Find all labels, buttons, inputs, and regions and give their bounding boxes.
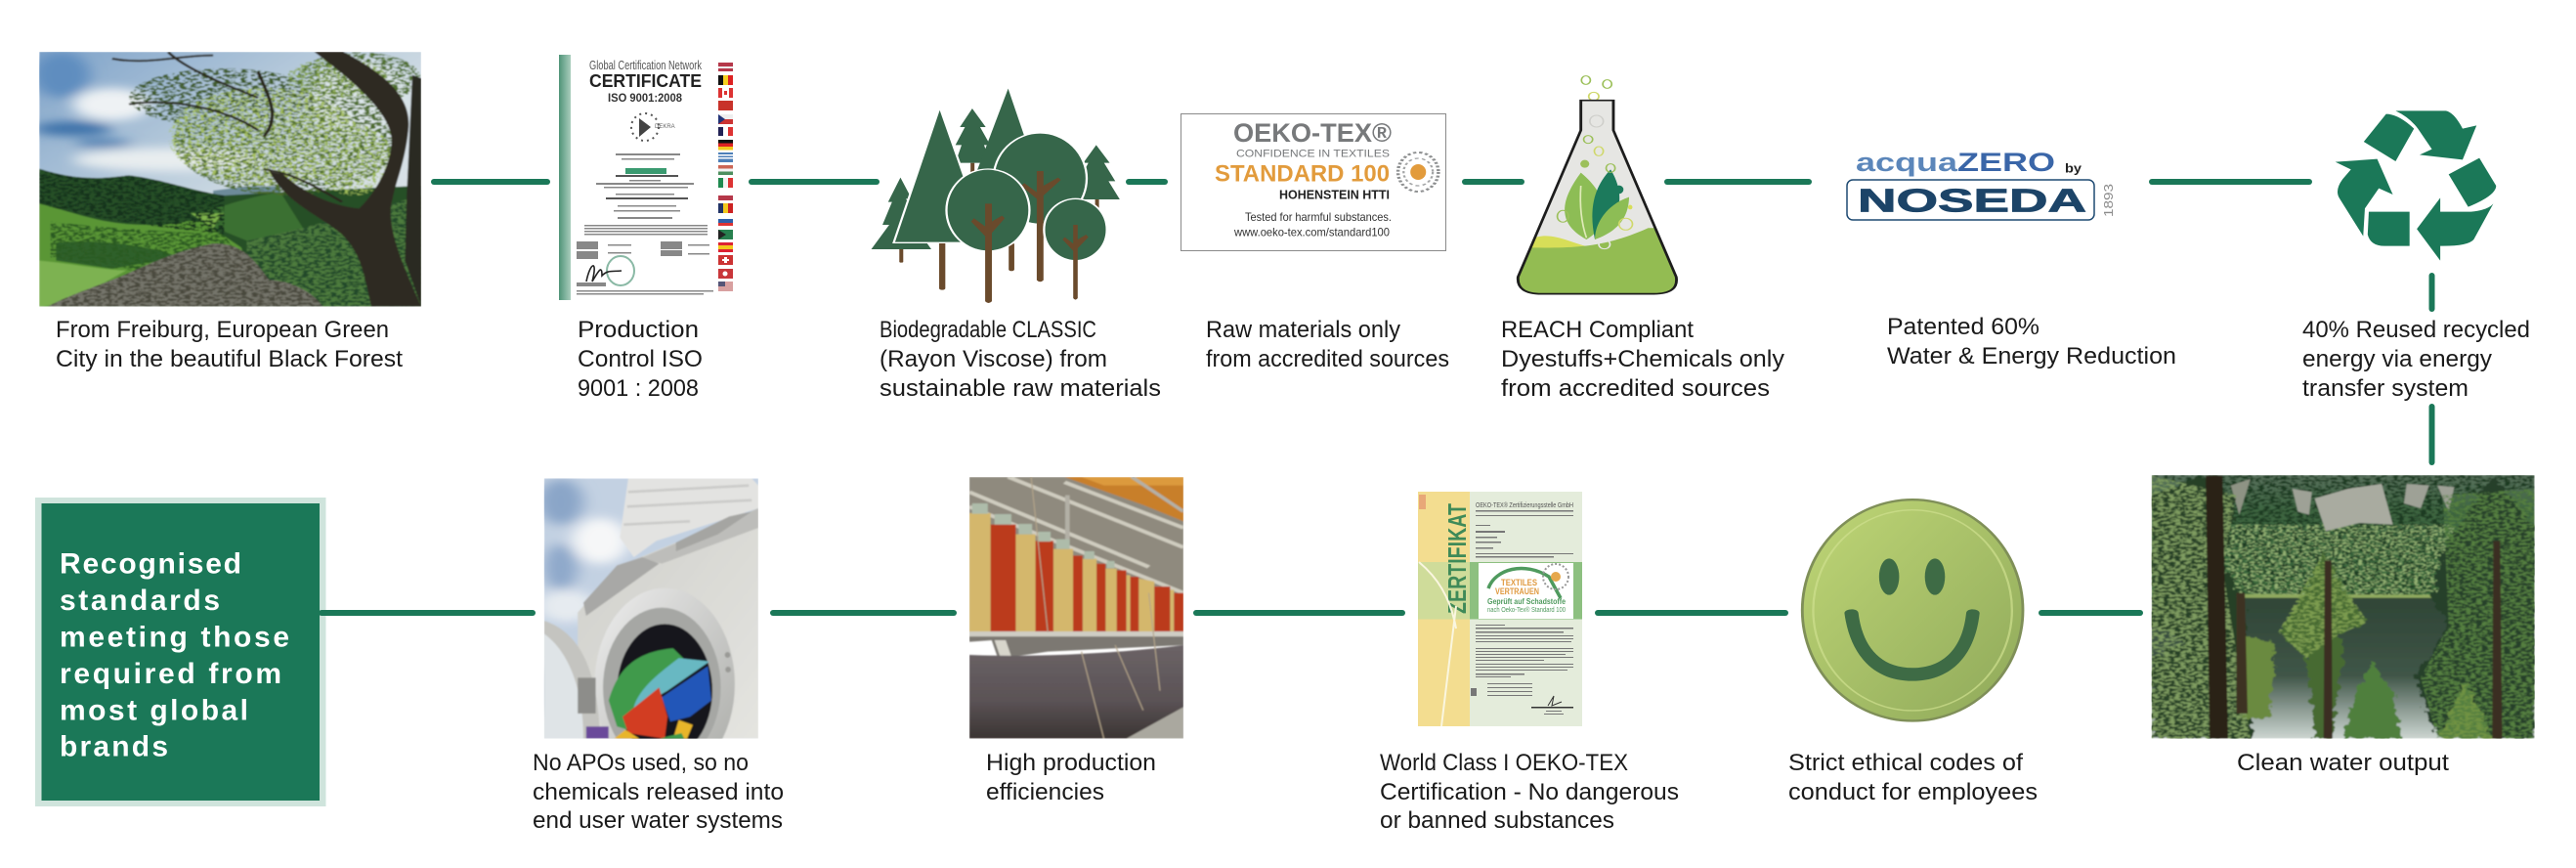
caption: From Freiburg, European Green [56, 317, 389, 343]
connector: Noseda logo to recycle icon [2149, 179, 2312, 185]
caption [578, 317, 703, 402]
image: ISO 9001 certificate: CERTIFICATE [589, 71, 702, 91]
caption: Raw materials only [1206, 317, 1400, 343]
logo: OEKO-TEX Standard 100 label: CONFIDENCE IN TEXTILES [1236, 149, 1390, 160]
caption [1380, 750, 1679, 834]
step: REACH compliant [1501, 76, 1784, 402]
logo: acquaZERO by Noseda: NOSEDA [1858, 184, 2086, 220]
image: ISO 9001 certificate [559, 55, 735, 300]
caption: Biodegradable CLASSIC [880, 317, 1096, 343]
caption: Strict ethical codes of [1788, 750, 2023, 776]
connector: trees to OEKO-TEX label [1126, 179, 1168, 185]
logo: OEKO-TEX Standard 100 label: Tested for harmful substances. [1245, 210, 1392, 224]
logo: OEKO-TEX Standard 100 label: OEKO-TEX® [1233, 118, 1392, 148]
caption: from accredited sources [1501, 375, 1770, 402]
connector: flask to Noseda logo [1664, 179, 1812, 185]
caption: Dyestuffs+Chemicals only [1501, 346, 1784, 372]
callout: recognised standards box: Recognised [60, 547, 241, 581]
image: OEKO-TEX Zertifikat certificate: nach Oeko-Tex® Standard 100 [1487, 606, 1566, 614]
connector: recognised standards box to washer [319, 610, 536, 616]
caption [56, 317, 403, 372]
step: clean water output [2152, 475, 2535, 776]
step: water and energy reduction [1847, 148, 2176, 369]
step: ISO certificate [559, 55, 735, 402]
image: OEKO-TEX Zertifikat certificate: VERTRAUEN [1495, 586, 1539, 596]
caption: transfer system [2302, 375, 2469, 402]
caption [1887, 314, 2176, 369]
connector: certificate to smiley [1595, 610, 1788, 616]
caption [986, 750, 1156, 805]
logo: OEKO-TEX Standard 100 label [1181, 113, 1446, 250]
caption: chemicals released into [533, 779, 784, 805]
caption: from accredited sources [1206, 346, 1449, 372]
icon: green smiley face [1801, 499, 2024, 722]
caption [880, 317, 1161, 402]
callout: recognised standards box [35, 498, 326, 806]
caption: energy via energy [2302, 346, 2492, 372]
caption: REACH Compliant [1501, 317, 1694, 343]
caption [1788, 750, 2038, 805]
logo: acquaZERO by Noseda: 1893 [2101, 184, 2116, 217]
caption: World Class I OEKO-TEX [1380, 750, 1628, 776]
connector: washer to thread photo [770, 610, 957, 616]
callout: recognised standards box: brands [60, 731, 168, 762]
icon: recycling arrows [2336, 110, 2496, 261]
logo: OEKO-TEX Standard 100 label: www.oeko-tex.com/standard100 [1233, 226, 1390, 239]
step: Freiburg [33, 52, 421, 372]
image: OEKO-TEX Zertifikat certificate: TEXTILES [1501, 578, 1537, 587]
caption: efficiencies [986, 779, 1104, 805]
caption [1501, 317, 1784, 402]
icon: laboratory flask with leaves [1517, 75, 1678, 295]
caption: or banned substances [1380, 807, 1614, 834]
connector: OEKO-TEX label to flask [1462, 179, 1524, 185]
image: ISO 9001 certificate: DEKRA [655, 124, 675, 130]
step: reused recycled energy [2302, 110, 2530, 402]
image: OEKO-TEX Zertifikat certificate [1418, 492, 1582, 726]
callout: recognised standards box: standards [60, 585, 220, 617]
logo: OEKO-TEX Standard 100 label: STANDARD 100 [1215, 161, 1390, 188]
image: OEKO-TEX Zertifikat certificate: Geprüft auf Schadstoffe [1487, 597, 1566, 606]
photo: washing machine with colourful laundry [543, 478, 758, 739]
logo: acquaZERO by Noseda: acqua ZERO [1856, 148, 2055, 177]
caption [1206, 317, 1449, 372]
image: ISO 9001 certificate: Global Certification Network [589, 59, 703, 72]
caption: No APOs used, so no [533, 750, 749, 776]
image: OEKO-TEX Zertifikat certificate: OEKO-TEX® Zertifizierungsstelle GmbH [1476, 501, 1573, 509]
logo: acquaZERO by Noseda [1847, 148, 2116, 220]
caption: Control ISO [578, 346, 703, 372]
photo: forest lake [2152, 475, 2535, 739]
caption: Production [578, 317, 699, 343]
connector: smiley to lake photo [2039, 610, 2143, 616]
caption: sustainable raw materials [880, 375, 1161, 402]
caption: conduct for employees [1788, 779, 2038, 805]
caption: 9001 : 2008 [578, 375, 699, 402]
step: OEKO-TEX certification [1380, 492, 1679, 834]
caption: end user water systems [533, 807, 783, 834]
step: biodegradable classic [872, 89, 1161, 402]
logo: acquaZERO by Noseda: by [2065, 161, 2082, 176]
connector: recycle icon to caption [2429, 273, 2435, 312]
caption: High production [986, 750, 1156, 776]
connector: thread photo to certificate [1193, 610, 1405, 616]
caption: City in the beautiful Black Forest [56, 346, 403, 372]
photo: Black Forest landscape with tree [33, 52, 421, 307]
caption: Certification - No dangerous [1380, 779, 1679, 805]
caption: Clean water output [2237, 750, 2449, 776]
logo: OEKO-TEX Standard 100 label: HOHENSTEIN HTTI [1279, 189, 1390, 202]
step: raw materials [1181, 113, 1449, 372]
step: no APOs [533, 478, 784, 834]
caption [2302, 317, 2530, 402]
caption: (Rayon Viscose) from [880, 346, 1107, 372]
caption [533, 750, 784, 834]
caption: Water & Energy Reduction [1887, 343, 2176, 369]
step: ethical codes [1788, 499, 2038, 805]
image: ISO 9001 certificate: ISO 9001:2008 [608, 93, 683, 105]
image: OEKO-TEX Zertifikat certificate: ZERTIFIKAT [1442, 503, 1472, 614]
connector: ISO certificate to trees [749, 179, 880, 185]
icon: forest of stylised trees [872, 89, 1120, 303]
callout: recognised standards box: required from [60, 658, 281, 690]
connector: caption to lake photo [2429, 404, 2435, 465]
callout: recognised standards box: most global [60, 694, 248, 727]
caption: Patented 60% [1887, 314, 2039, 340]
step: high production efficiencies [969, 476, 1183, 805]
connector: Freiburg to ISO certificate [431, 179, 550, 185]
photo: rows of thread spools in factory [969, 476, 1183, 739]
caption: 40% Reused recycled [2302, 317, 2530, 343]
callout: recognised standards box: meeting those [60, 622, 289, 653]
